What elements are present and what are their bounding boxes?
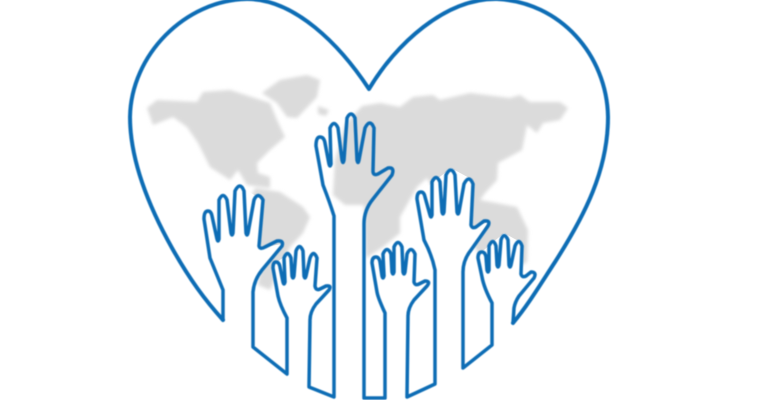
map: Iceland bbox=[318, 106, 329, 116]
raised hands bbox=[204, 114, 535, 398]
map: Greenland bbox=[262, 75, 320, 118]
heart and hands outline bbox=[130, 0, 608, 398]
white hand fills bbox=[204, 168, 534, 400]
map: Eurasia and Africa bbox=[333, 93, 568, 280]
world map bbox=[147, 75, 568, 290]
map: South America bbox=[250, 188, 310, 290]
map: North America bbox=[147, 90, 285, 188]
heart outline bbox=[130, 0, 608, 323]
